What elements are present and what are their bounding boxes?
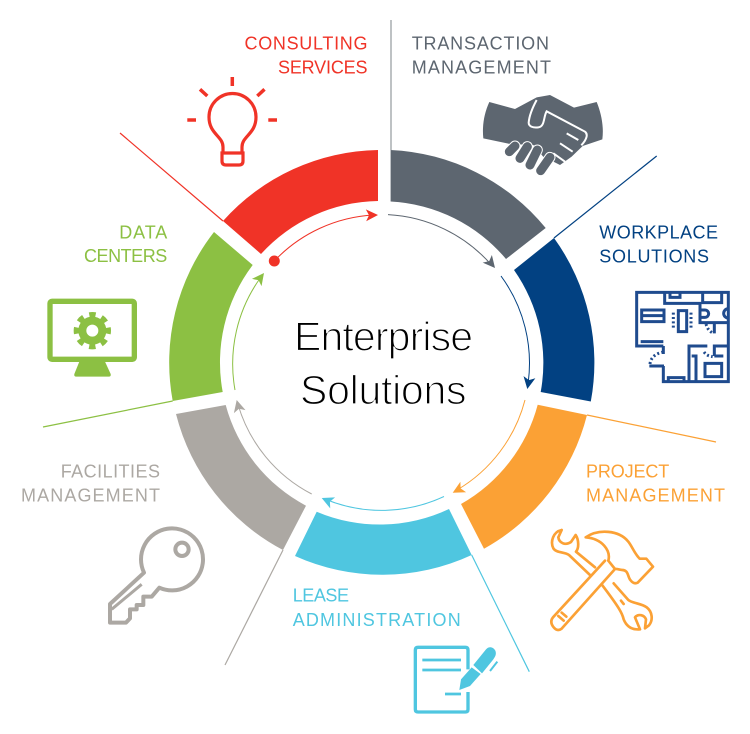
arrow: transaction to workplace bbox=[388, 215, 500, 272]
heading: facilities management: MANAGEMENT bbox=[21, 486, 160, 506]
heading: facilities management bbox=[21, 462, 160, 506]
icon: hammer and wrench bbox=[551, 530, 653, 630]
heading: facilities management: FACILITIES bbox=[61, 462, 160, 482]
heading: project management: MANAGEMENT bbox=[586, 486, 725, 506]
panel: project management bbox=[450, 400, 725, 630]
arrow: data centers to consulting bbox=[233, 269, 269, 390]
heading: lease administration bbox=[293, 586, 461, 630]
heading: consulting services: CONSULTING bbox=[244, 33, 368, 53]
panel: lease administration bbox=[293, 493, 529, 712]
panel: consulting services bbox=[120, 33, 378, 266]
panel: data centers bbox=[43, 222, 269, 427]
ring segment: lease administration bbox=[295, 509, 472, 575]
heading: lease administration: LEASE bbox=[293, 586, 349, 606]
icon: document and pen bbox=[415, 647, 497, 712]
heading: project management bbox=[586, 462, 725, 506]
heading: transaction management bbox=[412, 33, 551, 77]
heading: workplace solutions: SOLUTIONS bbox=[599, 246, 709, 266]
heading: data centers: CENTERS bbox=[84, 246, 167, 266]
heading: transaction management: MANAGEMENT bbox=[412, 57, 551, 77]
arrow: lease to facilities bbox=[319, 493, 444, 510]
title: Enterprise bbox=[294, 314, 473, 360]
panel: transaction management bbox=[388, 20, 603, 272]
heading: consulting services bbox=[244, 33, 368, 77]
title bbox=[294, 314, 473, 413]
leader line: project management bbox=[587, 415, 716, 442]
ring segment: project management bbox=[461, 405, 587, 549]
leader line: consulting services bbox=[120, 133, 223, 221]
ring segment: consulting services bbox=[223, 150, 378, 254]
leader line: facilities management bbox=[225, 550, 283, 665]
ring segment: workplace solutions bbox=[514, 238, 594, 402]
arrow: workplace to project bbox=[501, 276, 535, 390]
leader line: lease administration bbox=[472, 555, 529, 672]
icon: light bulb bbox=[187, 77, 277, 165]
leader line: workplace solutions bbox=[554, 156, 657, 238]
ring segment: facilities management bbox=[176, 405, 306, 550]
heading: workplace solutions bbox=[599, 222, 718, 266]
arrow: start dot to consulting services bbox=[269, 209, 378, 266]
panel: workplace solutions bbox=[501, 156, 728, 402]
arrow: project to lease bbox=[450, 400, 525, 498]
heading: project management: PROJECT bbox=[586, 462, 669, 482]
arrow: facilities to data centers bbox=[231, 398, 312, 494]
icon: floor plan bbox=[637, 292, 728, 382]
heading: transaction management: TRANSACTION bbox=[412, 33, 549, 53]
heading: workplace solutions: WORKPLACE bbox=[599, 222, 718, 242]
heading: consulting services: SERVICES bbox=[278, 57, 368, 77]
icon: monitor with gear bbox=[50, 301, 134, 377]
heading: data centers: DATA bbox=[119, 222, 167, 242]
icon: key bbox=[110, 528, 203, 623]
icon: handshake bbox=[483, 95, 603, 171]
panel: facilities management bbox=[21, 398, 312, 665]
ring segment: transaction management bbox=[391, 150, 546, 259]
leader line: data centers bbox=[43, 401, 173, 427]
title: Solutions bbox=[300, 367, 466, 413]
leader line: transaction management bbox=[390, 20, 392, 150]
ring segment: data centers bbox=[169, 232, 253, 401]
heading: lease administration: ADMINISTRATION bbox=[293, 610, 461, 630]
heading: data centers bbox=[84, 222, 167, 266]
